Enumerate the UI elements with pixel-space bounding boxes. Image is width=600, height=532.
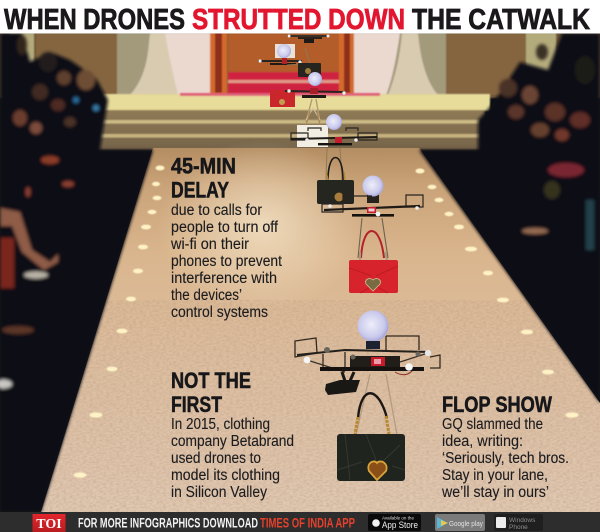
- callout: not the first: NOT THE: [171, 368, 251, 393]
- callout: 45-min delay: DELAY: [171, 178, 229, 202]
- title banner: STRUTTED DOWN: [192, 4, 405, 36]
- footer call to action: FOR MORE INFOGRAPHICS DOWNLOAD: [78, 516, 258, 530]
- photo: right audience: [419, 33, 600, 403]
- photo: fashion show stage backdrop: [0, 33, 600, 98]
- drone globe light: [358, 310, 388, 342]
- photo: catwalk runway carpet: [0, 140, 600, 512]
- callout: 45-min delay: interference with: [171, 270, 277, 287]
- Windows Phone badge: [494, 514, 543, 531]
- callout: 45-min delay: control systems: [171, 304, 268, 321]
- drone 4 with red handbag: [270, 72, 346, 122]
- callout: 45-min delay: phones to prevent: [171, 253, 283, 270]
- callout: flop show: we’ll stay in ours’: [441, 484, 549, 501]
- App Store badge: [368, 514, 421, 531]
- callout: flop show: ‘Seriously, tech bros.: [442, 450, 569, 467]
- drone 2 with red handbag: [322, 176, 423, 293]
- TOI logo: TOI: [36, 517, 62, 532]
- Google Play badge: Google play: [449, 519, 483, 528]
- App Store badge: Available on the: [382, 516, 414, 520]
- photo: left audience: [0, 33, 153, 512]
- Google Play badge: [435, 514, 485, 531]
- callout: 45-min delay: people to turn off: [171, 219, 279, 236]
- App Store badge: App Store: [382, 520, 418, 530]
- callout: flop show: FLOP SHOW: [442, 392, 552, 417]
- callout: not the first: company Betabrand: [171, 433, 294, 450]
- callout: 45-min delay: 45-MIN: [171, 154, 236, 178]
- drone 5 with black handbag: [258, 44, 321, 77]
- handbag handle and gold chain: [358, 393, 387, 418]
- footer call to action: TIMES OF INDIA APP: [260, 516, 355, 530]
- Windows Phone badge: Phone: [509, 524, 528, 531]
- callout: 45-min delay: [170, 154, 283, 321]
- drone camera: [325, 380, 360, 395]
- runway floor lights: [74, 166, 578, 478]
- callout: not the first: [171, 368, 294, 501]
- title banner: WHEN DRONES: [4, 4, 185, 36]
- drone frame and rotors: [295, 336, 440, 368]
- callout: not the first: FIRST: [171, 392, 222, 417]
- callout: flop show: idea, writing:: [442, 433, 523, 450]
- callout: 45-min delay: due to calls for: [171, 202, 262, 219]
- callout: flop show: GQ slammed the: [442, 416, 543, 433]
- callout: 45-min delay: wi-fi on their: [170, 236, 249, 253]
- callout: not the first: used drones to: [171, 450, 261, 467]
- callout: not the first: model its clothing: [171, 467, 280, 484]
- gold heart clasp: [368, 461, 387, 480]
- callout: flop show: [441, 392, 569, 501]
- black handbag: [337, 434, 405, 481]
- strings to bag: [356, 374, 397, 435]
- callout: not the first: in Silicon Valley: [171, 484, 267, 501]
- drone 3 with black handbag: [291, 112, 377, 204]
- callout: flop show: Stay in your lane,: [442, 467, 548, 484]
- footer bar: [0, 512, 600, 532]
- callout: 45-min delay: the devices’: [171, 287, 242, 304]
- photo: stage platform and steps: [90, 93, 490, 150]
- title banner: [0, 0, 600, 36]
- Windows Phone badge: Windows: [509, 517, 536, 524]
- TOI logo: [32, 514, 66, 532]
- drone 6: farthest, at back of stage: [287, 34, 330, 43]
- callout: not the first: In 2015, clothing: [171, 416, 270, 433]
- drone 1: largest, with camera and black handbag: [295, 310, 440, 481]
